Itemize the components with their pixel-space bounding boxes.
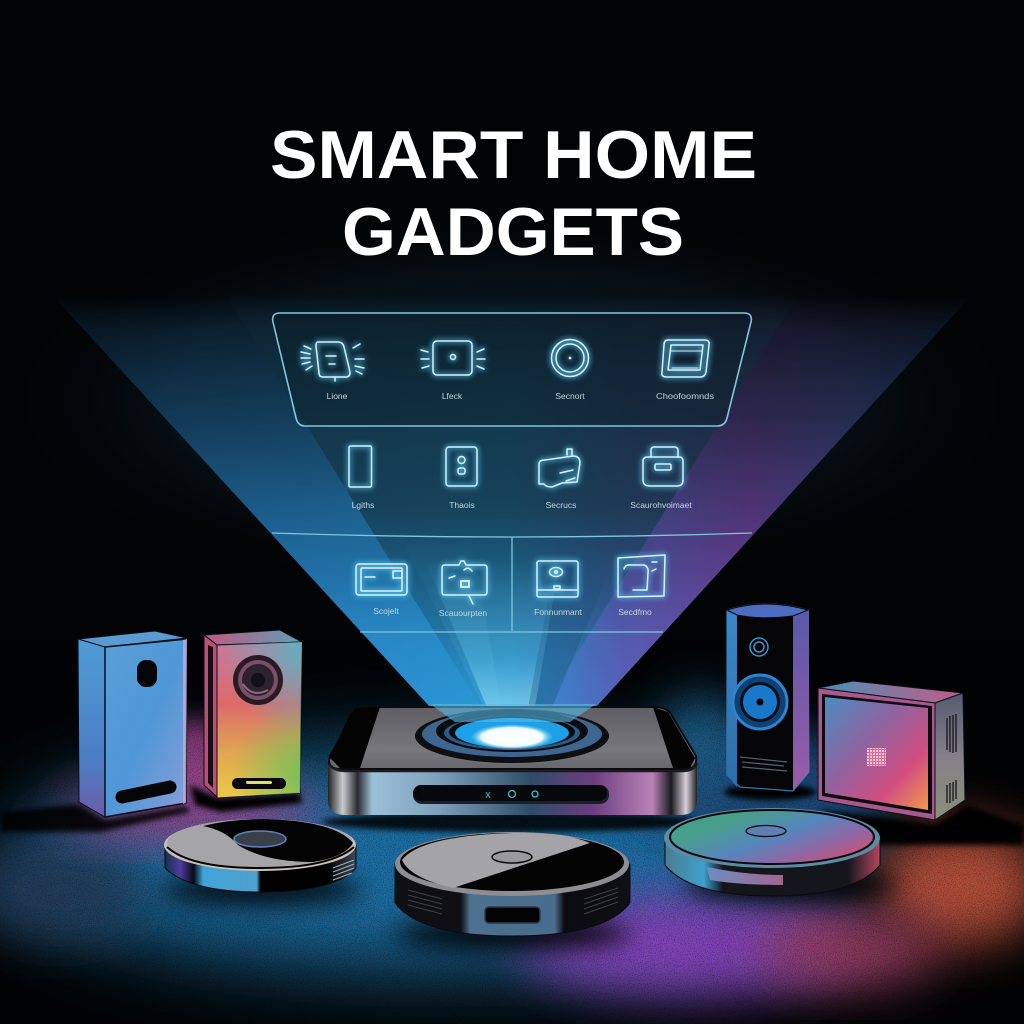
device: blue box	[0, 631, 190, 832]
top ring	[234, 831, 286, 847]
label: entertainment: Scaurohvoimaet	[630, 500, 692, 510]
icon: speaker panel	[537, 561, 578, 597]
panel: bottom row of hologram	[272, 533, 752, 632]
title: GADGETS	[342, 194, 684, 270]
label: lights: Lgiths	[352, 500, 374, 510]
title	[270, 117, 757, 270]
label: surveillance: Scauourpten	[439, 608, 487, 618]
hub top	[329, 707, 696, 769]
device: left puck	[162, 819, 362, 906]
floor grain	[0, 640, 1024, 1024]
front slot	[707, 867, 783, 885]
label: thermostats: Thaois	[449, 500, 475, 510]
icon: camera block	[539, 449, 580, 487]
device: right gradient puck	[664, 808, 895, 901]
label: sensors: Secrucs	[546, 500, 576, 510]
panel: middle row of hologram	[349, 446, 692, 510]
small camera ring	[750, 638, 768, 656]
icon: control screen	[662, 340, 709, 377]
icon: card reader	[356, 564, 407, 595]
label: smart: Scojelt	[373, 606, 399, 616]
front status strip: x	[485, 789, 491, 801]
panel: top row of hologram	[273, 313, 751, 426]
top button	[492, 851, 532, 863]
projector lens	[415, 704, 609, 763]
front status strip	[413, 785, 609, 804]
device: video doorbell	[724, 604, 816, 800]
front sensor	[485, 907, 540, 923]
top button	[746, 826, 786, 836]
icon: home panel	[301, 342, 364, 381]
vents	[333, 860, 354, 880]
icon: security ring	[552, 340, 588, 376]
title: SMART HOME	[270, 117, 757, 193]
icon: light tile	[349, 446, 372, 487]
light slot	[232, 778, 286, 789]
speaker ring	[733, 675, 787, 729]
camera lens	[233, 655, 283, 705]
label: security: Secnort	[555, 391, 585, 401]
central dark wedge	[282, 363, 755, 688]
central light ray	[434, 579, 554, 706]
device: rainbow camera box	[190, 630, 302, 812]
hologram beam	[52, 295, 972, 730]
vent slot	[122, 787, 170, 797]
icon: tablet	[618, 555, 665, 597]
icon: light panel	[421, 341, 485, 375]
speaker grille	[740, 757, 787, 771]
icon: wall outlet	[446, 447, 477, 486]
hub side	[328, 762, 697, 815]
label: control: Choofoomnds	[656, 391, 714, 401]
device: central hub	[322, 704, 702, 832]
device: center robot vacuum	[394, 832, 630, 948]
background halo behind beam	[0, 200, 1024, 600]
vents	[408, 888, 618, 914]
device: gradient display box	[818, 681, 1024, 845]
side vents	[947, 714, 956, 803]
icon: camera	[442, 561, 487, 604]
label: entertainment: Fonnunmant	[534, 607, 582, 617]
label: lock: Lfeck	[442, 391, 463, 401]
glowing floor	[0, 695, 1024, 995]
label: home: Lione	[327, 391, 348, 401]
label: secondary: Secdfmo	[618, 607, 652, 617]
icon: storage box	[643, 447, 683, 486]
grid lines	[272, 533, 752, 632]
indicator light	[246, 781, 272, 784]
QR pattern	[867, 748, 886, 766]
sensor hole	[137, 660, 157, 687]
